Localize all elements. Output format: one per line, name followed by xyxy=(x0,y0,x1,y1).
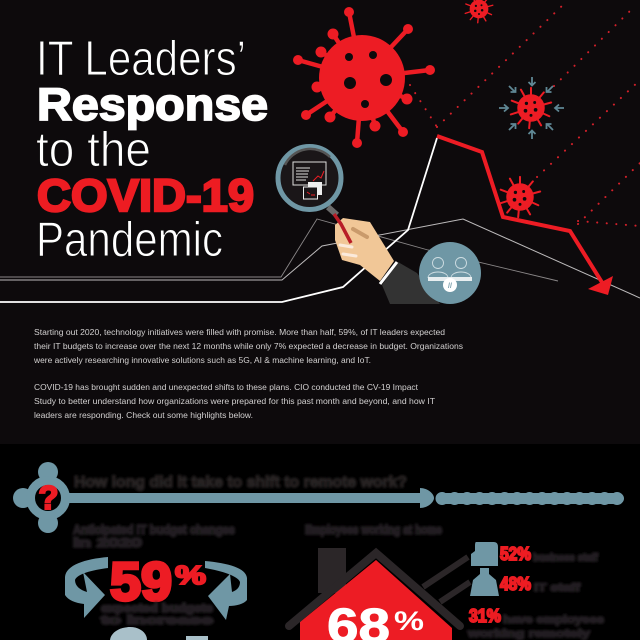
stat: 68%: % xyxy=(394,606,424,636)
icons: people xyxy=(470,542,499,596)
icon: blue circle with two developers xyxy=(419,242,481,304)
top dark background xyxy=(0,0,640,444)
stat labels: 31% xyxy=(469,606,501,626)
stat: 59% xyxy=(110,552,206,612)
icons: partial xyxy=(110,627,208,640)
subheading: home: Employees working at home xyxy=(305,522,442,537)
intro text block: their IT budgets to increase over the next 12 months while only 7% expected a decrease in budget. Organizations xyxy=(34,341,463,351)
icon: large virus xyxy=(293,7,435,148)
arrow: red falling line xyxy=(437,136,613,295)
icon: magnifying glass with hand xyxy=(278,146,440,304)
stat labels xyxy=(469,544,531,626)
caption: budget increase xyxy=(101,601,214,627)
stat: 59%: 59 xyxy=(110,552,172,612)
section heading: How long did it take to shift to remote work? xyxy=(74,474,407,491)
icon: small virus top xyxy=(465,0,493,23)
title: Pandemic xyxy=(36,213,223,267)
title: Response xyxy=(37,79,268,130)
line chart: grey trend lines xyxy=(0,138,640,302)
title: to the xyxy=(36,123,151,177)
stat captions: have employees xyxy=(503,614,604,626)
title: IT Leaders’ xyxy=(36,32,246,86)
intro text block: COVID-19 has brought sudden and unexpected shifts to these plans. CIO conducted the CV-19 Impact xyxy=(34,382,419,392)
stat captions: working remotely xyxy=(467,628,591,640)
caption: budget increase: expected budgets xyxy=(101,601,213,615)
panel: work from home xyxy=(289,522,604,640)
panel: IT budgets xyxy=(65,522,247,640)
stat captions xyxy=(467,552,604,640)
icon: virus with surrounding arrows xyxy=(499,77,564,139)
stat captions: business staff xyxy=(533,552,598,564)
title xyxy=(36,32,268,267)
stat: 59%: % xyxy=(175,560,206,590)
subheading: budgets: Anticipated IT budget changes xyxy=(73,522,235,537)
stat labels: 52% xyxy=(500,544,531,564)
dotted virus trajectories xyxy=(410,2,640,226)
intro text block xyxy=(33,327,463,420)
subheading: budgets: in 2020 xyxy=(73,535,142,550)
section header bar xyxy=(66,488,624,508)
intro text block: Study to better understand how organizations were prepared for this past month and beyond, and how IT xyxy=(34,396,436,406)
stat: 68% xyxy=(327,600,424,640)
subheading: budgets xyxy=(73,522,235,550)
stat captions: IT staff xyxy=(534,582,580,594)
caption: budget increase: to increase xyxy=(101,613,214,627)
icon: question mark target: ? xyxy=(38,479,59,516)
icon: question mark target xyxy=(13,462,66,533)
icon: blue circle with two developers: // xyxy=(448,283,452,290)
title: COVID-19 xyxy=(37,170,254,221)
stat labels: 48% xyxy=(500,574,531,594)
icon: small virus on chart xyxy=(500,177,540,217)
intro text block: Starting out 2020, technology initiatives were filled with promise. More than half, 59%, of IT leaders expected xyxy=(34,327,445,337)
intro text block: were actively researching innovative solutions such as 5G, AI & machine learning, and IoT. xyxy=(33,355,371,365)
icon: house xyxy=(289,548,470,640)
intro text block: leaders are responding. Check out some highlights below. xyxy=(34,410,253,420)
icon: rotating arrows xyxy=(65,557,247,620)
